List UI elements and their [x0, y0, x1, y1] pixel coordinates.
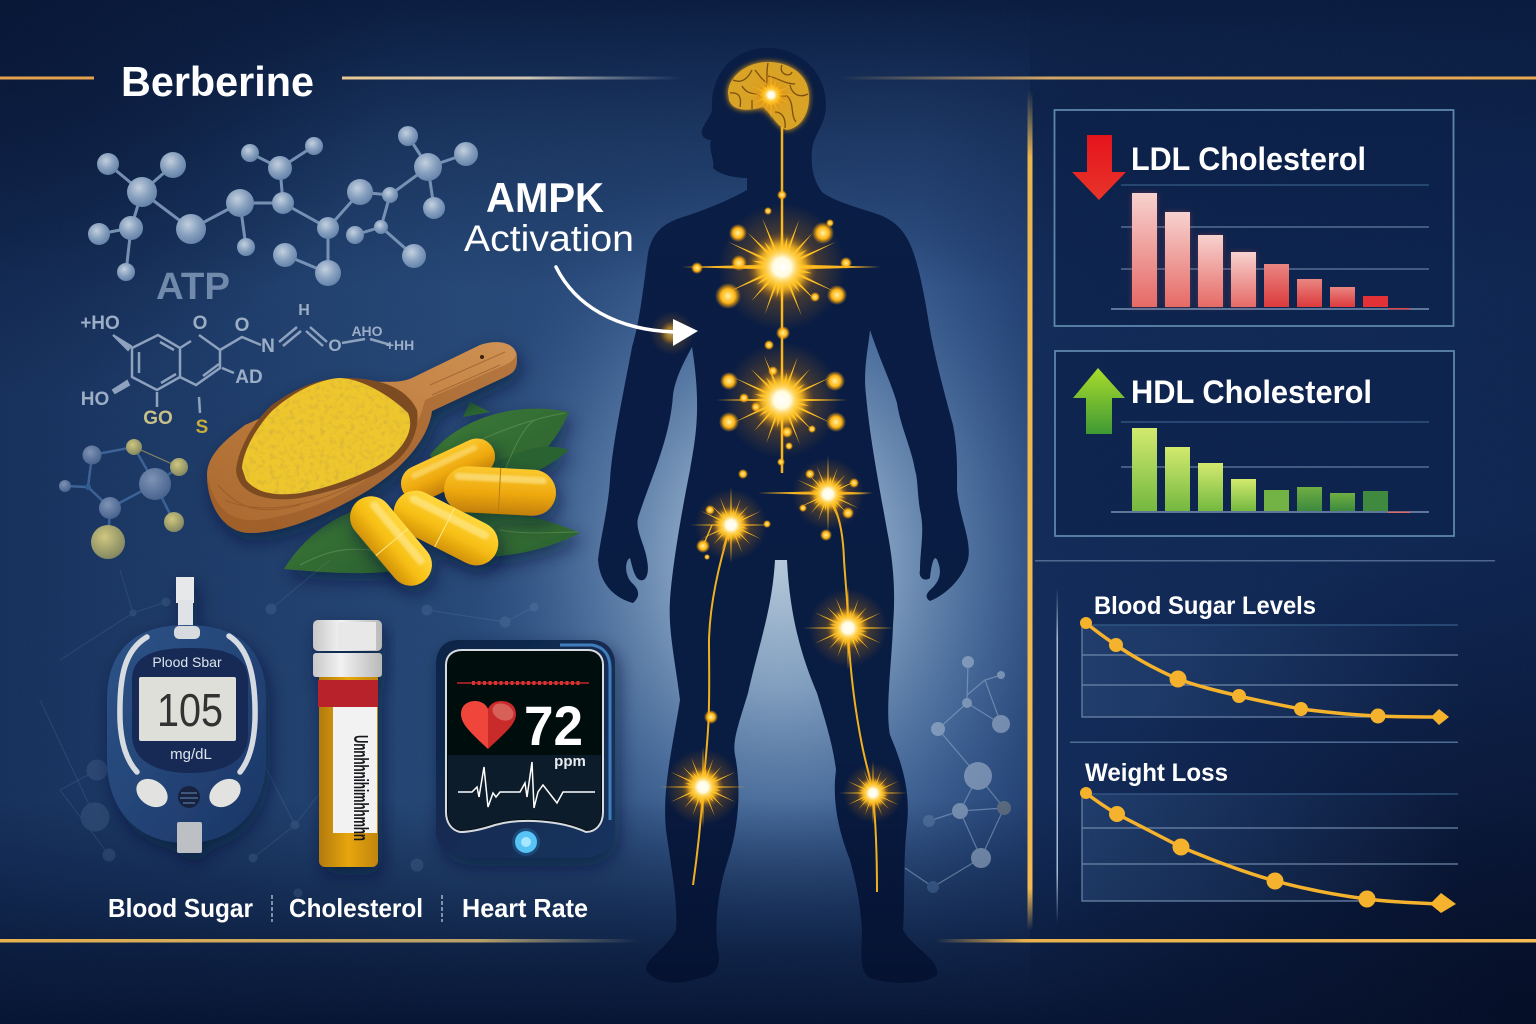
- molecule: upper ball and stick: [88, 126, 478, 286]
- chemical structure: AD: [235, 367, 263, 388]
- chemical structure: +HO: [80, 313, 120, 334]
- heart rate monitor: ppm: [554, 753, 586, 770]
- divider: [1070, 742, 1458, 743]
- bar chart: HDL: [1132, 428, 1410, 513]
- icon: green up arrow: [1073, 368, 1125, 434]
- chemical structure: [80, 302, 414, 438]
- burst: chest: [682, 190, 880, 350]
- glucose meter: mg/dL: [170, 746, 212, 763]
- chemical structure: AHO: [351, 323, 383, 339]
- faint network: lower left: [40, 560, 538, 897]
- chemical structure: +HH: [386, 337, 414, 353]
- molecule: lower left: [59, 439, 188, 559]
- arrow: AMPK pointer: [556, 267, 698, 355]
- AMPK activation label: [464, 174, 634, 259]
- leaves: [284, 402, 580, 573]
- panel: LDL cholesterol: LDL Cholesterol: [1131, 141, 1366, 177]
- line chart: blood sugar levels: Blood Sugar Levels: [1094, 592, 1316, 620]
- chemical structure: O: [193, 313, 207, 334]
- burst: thigh left small: [704, 710, 718, 724]
- energy pathways: [693, 127, 877, 892]
- burst: pelvis right: [758, 456, 873, 541]
- activation bursts: [659, 190, 907, 828]
- line chart: blood sugar levels: [1080, 592, 1458, 725]
- chemical structure: S: [196, 417, 208, 438]
- chemical structure: HO: [81, 389, 109, 410]
- heart rate monitor: 72: [524, 694, 583, 757]
- burst: knee right: [839, 761, 907, 825]
- ATP label: ATP: [156, 266, 230, 308]
- capsule 1: [395, 433, 501, 507]
- cholesterol test tube: [313, 620, 382, 867]
- faint network: right of body: [905, 656, 1011, 893]
- glucose meter: [107, 577, 266, 853]
- device labels: Heart Rate: [462, 893, 588, 923]
- burst: abdomen: [716, 338, 848, 479]
- device labels: [108, 893, 588, 923]
- chemical structure: O: [235, 315, 249, 336]
- bar chart: LDL: [1132, 193, 1410, 310]
- yellow capsules: [341, 433, 557, 594]
- panel: LDL cholesterol: [1054, 110, 1454, 326]
- line chart: weight loss: Weight Loss: [1085, 759, 1228, 787]
- wooden scoop with yellow powder: [207, 342, 517, 533]
- AMPK activation label: Activation: [464, 218, 634, 259]
- burst: knee left: [659, 746, 747, 828]
- chemical structure: O: [328, 336, 342, 355]
- device labels: Cholesterol: [289, 893, 423, 923]
- device labels: Blood Sugar: [108, 893, 253, 923]
- glucose meter: Plood Sbar: [152, 654, 222, 670]
- cholesterol test tube: Unnhhnihimhhmhn: [349, 735, 371, 841]
- line chart: weight loss: [1080, 759, 1458, 913]
- icon: heart: [461, 700, 516, 749]
- panel: HDL cholesterol: [1055, 351, 1454, 536]
- capsule 2: [443, 465, 557, 517]
- glucose meter: 105: [157, 684, 223, 736]
- icon: red down arrow: [1072, 135, 1126, 200]
- capsule 3: [386, 483, 506, 573]
- chemical structure: GO: [143, 408, 173, 429]
- brain: [728, 62, 809, 130]
- heart rate monitor: [436, 640, 615, 858]
- test strip: [176, 577, 194, 630]
- capsule 4: [341, 488, 441, 594]
- panel: HDL cholesterol: HDL Cholesterol: [1131, 374, 1372, 410]
- human silhouette: [598, 48, 969, 983]
- title: Berberine: [121, 58, 314, 105]
- burst: hip left: [690, 487, 772, 563]
- chemical structure: H: [298, 302, 310, 319]
- AMPK activation label: AMPK: [486, 174, 604, 221]
- burst: thigh right: [803, 586, 893, 670]
- chemical structure: N: [261, 336, 275, 357]
